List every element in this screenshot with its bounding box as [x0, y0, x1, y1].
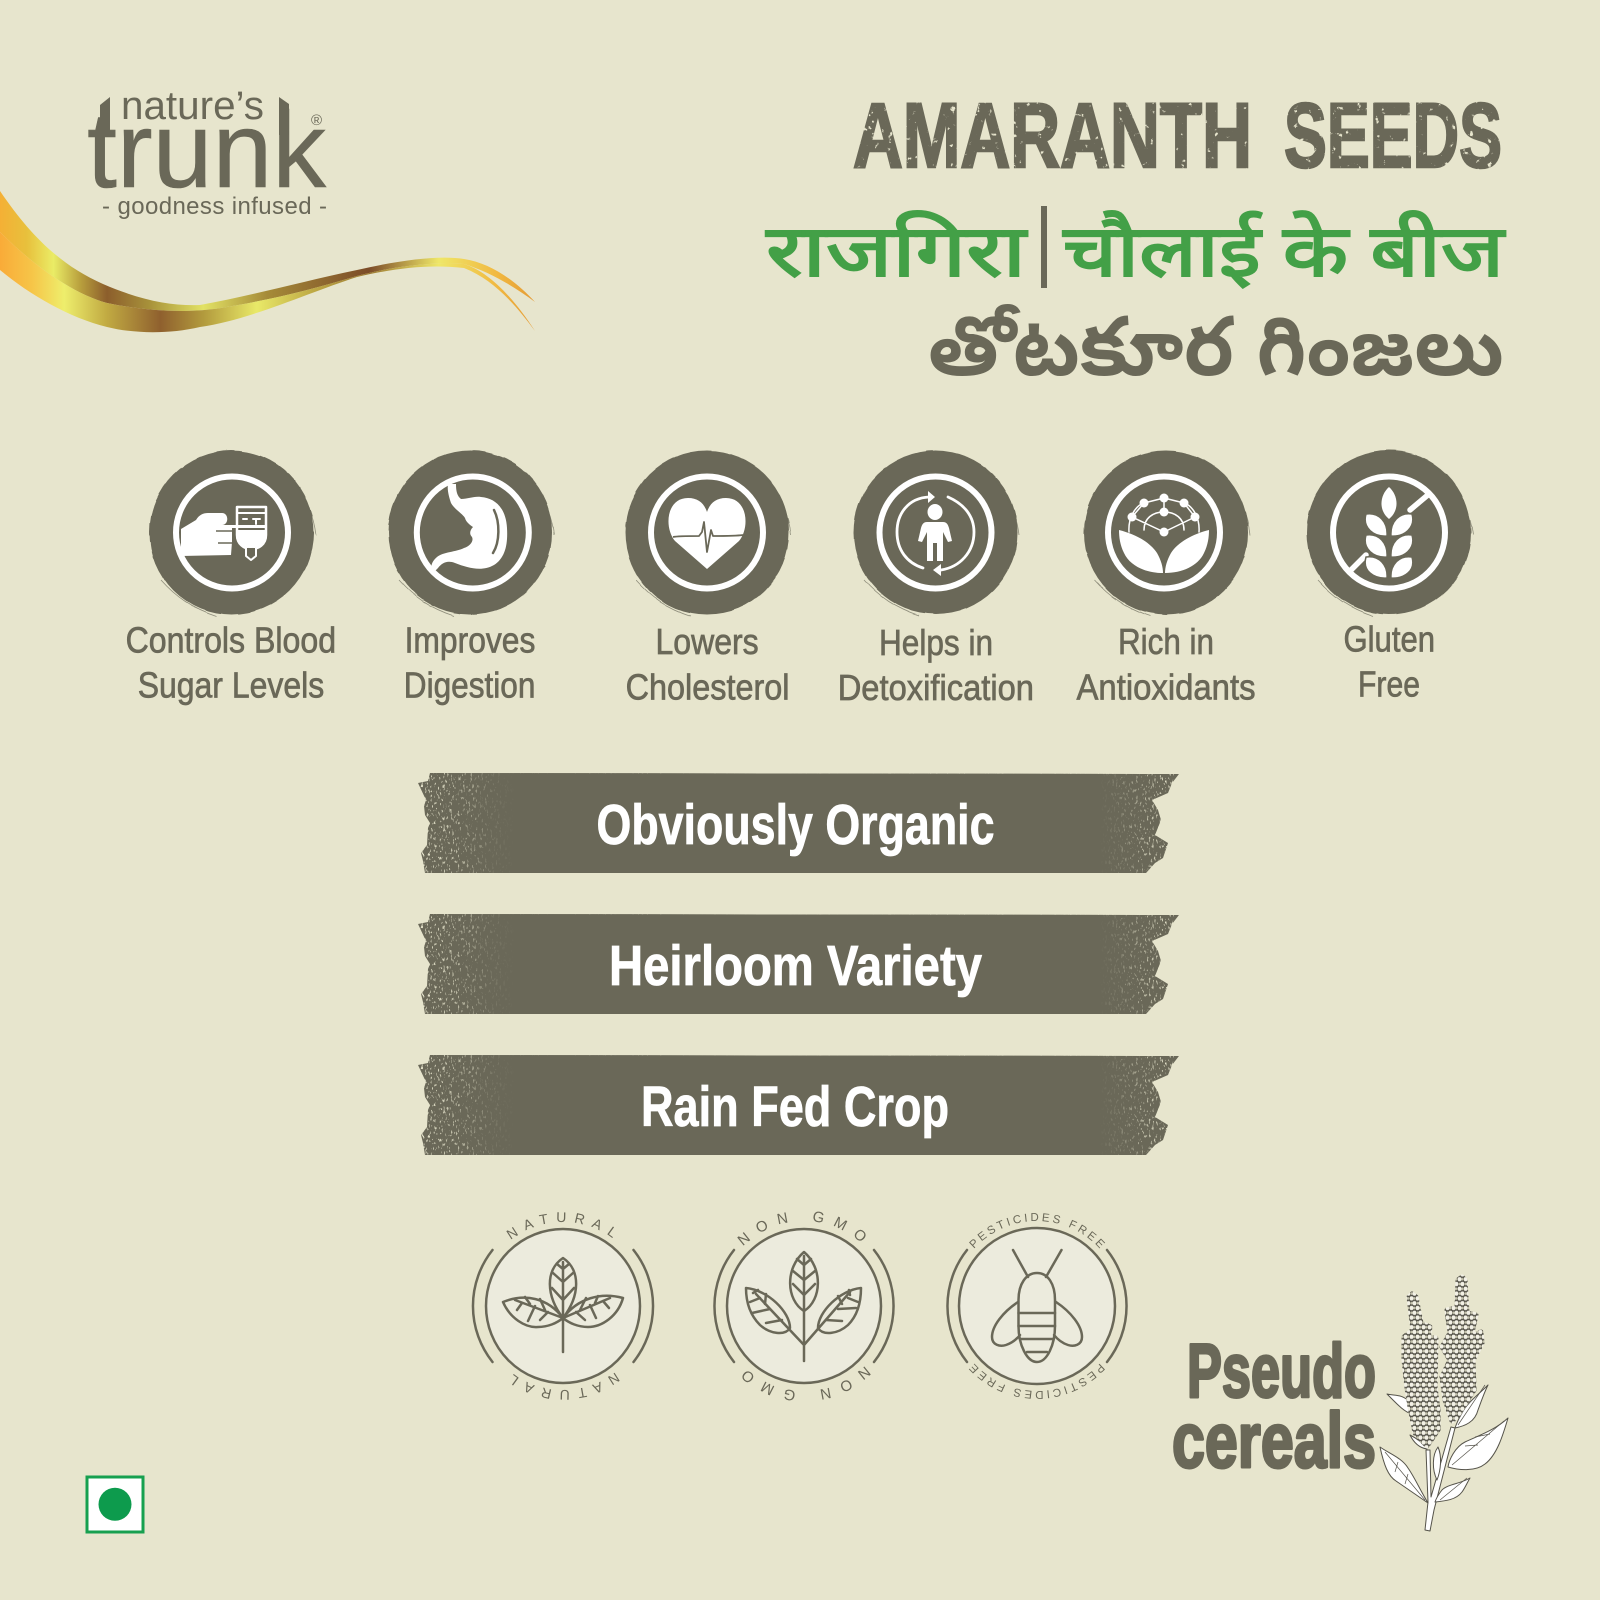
label: improves digestion: Improves	[405, 620, 535, 661]
label: helps in detoxification: Helps in	[879, 622, 993, 663]
label: gluten free	[1344, 619, 1435, 705]
banner: rain fed crop: Rain Fed Crop	[641, 1075, 949, 1139]
telugu name: తోటకూర గింజలు	[928, 303, 1504, 415]
brand logo	[87, 84, 327, 220]
banner: obviously organic: Obviously Organic	[596, 793, 994, 857]
badge arc text top: NATURAL	[506, 1212, 614, 1240]
icon: vegetarian mark	[87, 1477, 143, 1532]
icon: person with cycle arrows	[880, 476, 992, 588]
label: lowers cholesterol	[626, 621, 790, 707]
benefit: antioxidants	[1076, 450, 1256, 707]
logo tall stems	[100, 97, 289, 135]
logo word: trunk: trunk	[87, 89, 327, 210]
icon: heart with pulse	[651, 476, 763, 588]
pseudo cereals label: cereals	[1172, 1396, 1376, 1484]
icon: brush circle	[625, 450, 791, 616]
label: rich in antioxidants: Antioxidants	[1076, 666, 1256, 707]
label: rich in antioxidants: Rich in	[1118, 621, 1214, 662]
hindi: rajgira: राजगिरा	[766, 211, 1028, 306]
seed spike left	[1404, 1294, 1438, 1446]
icon: brush circle	[150, 450, 316, 616]
badge: natural	[472, 1212, 654, 1400]
badge: non gmo	[713, 1212, 895, 1400]
registered mark: ®	[311, 112, 322, 129]
benefit: detoxification	[838, 450, 1034, 708]
seed spike right	[1442, 1277, 1482, 1421]
banner: heirloom variety	[418, 914, 1180, 1014]
hindi name	[766, 206, 1506, 306]
label: improves digestion	[404, 620, 535, 706]
icon: crossed wheat	[1333, 476, 1445, 588]
icon: stomach	[417, 476, 529, 588]
label: controls blood sugar levels: Controls Blood	[126, 620, 336, 661]
plant leaves	[1380, 1385, 1508, 1503]
title: Amaranth Seeds: SEEDS	[1284, 85, 1502, 187]
banner: obviously organic	[418, 773, 1180, 873]
illustration: amaranth plant	[1380, 1277, 1508, 1531]
icon: brush circle	[1084, 450, 1250, 616]
badge arc text top: PESTICIDES FREE	[969, 1213, 1106, 1248]
badge arc text bottom: NON GMO	[742, 1366, 871, 1400]
plant stems	[1425, 1427, 1455, 1531]
benefit: cholesterol	[625, 450, 791, 707]
label: gluten free: Gluten	[1344, 619, 1435, 660]
divider	[1041, 206, 1047, 288]
logo tagline: - goodness infused -	[102, 193, 327, 220]
label: helps in detoxification: Detoxification	[838, 667, 1034, 708]
benefit: gluten free	[1307, 450, 1473, 705]
icon: brush circle	[388, 450, 554, 616]
gold swoosh	[0, 191, 535, 332]
title: Amaranth Seeds: AMARANTH	[853, 85, 1252, 187]
badge ring	[947, 1228, 1127, 1384]
logo word: nature's: nature’s	[121, 84, 264, 128]
icon: brush circle	[854, 450, 1019, 616]
pseudo cereals label	[1172, 1329, 1376, 1484]
label: controls blood sugar levels: Sugar Levels	[138, 665, 324, 706]
icon: bee	[992, 1250, 1082, 1362]
label: lowers cholesterol: Cholesterol	[626, 666, 790, 707]
badge ring	[714, 1229, 894, 1383]
icon: three leaves	[503, 1258, 623, 1352]
badge ring	[473, 1229, 653, 1383]
icon: leaves with molecule	[1108, 476, 1220, 588]
label: lowers cholesterol: Lowers	[656, 621, 759, 662]
badge arc text bottom: PESTICIDES FREE	[968, 1364, 1105, 1399]
banner: heirloom variety: Heirloom Variety	[609, 934, 982, 998]
hindi: chaulai ke beej: चौलाई के बीज	[1063, 210, 1506, 306]
badge arc text bottom: NATURAL	[512, 1372, 620, 1400]
label: helps in detoxification	[838, 622, 1034, 708]
label: improves digestion: Digestion	[404, 665, 535, 706]
icon: hand and blood drop vial	[176, 476, 288, 588]
label: controls blood sugar levels	[126, 620, 336, 706]
label: rich in antioxidants	[1076, 621, 1256, 707]
benefit: blood sugar	[126, 450, 336, 706]
badge arc text top: NON GMO	[737, 1212, 866, 1246]
icon: sprig of leaves	[746, 1252, 861, 1361]
benefit: digestion	[388, 450, 554, 706]
badge: pesticides free	[946, 1213, 1128, 1399]
label: gluten free: Free	[1358, 664, 1420, 705]
banner: rain fed crop	[418, 1055, 1180, 1155]
pseudo cereals label: Pseudo	[1187, 1329, 1376, 1414]
icon: brush circle	[1307, 450, 1473, 616]
